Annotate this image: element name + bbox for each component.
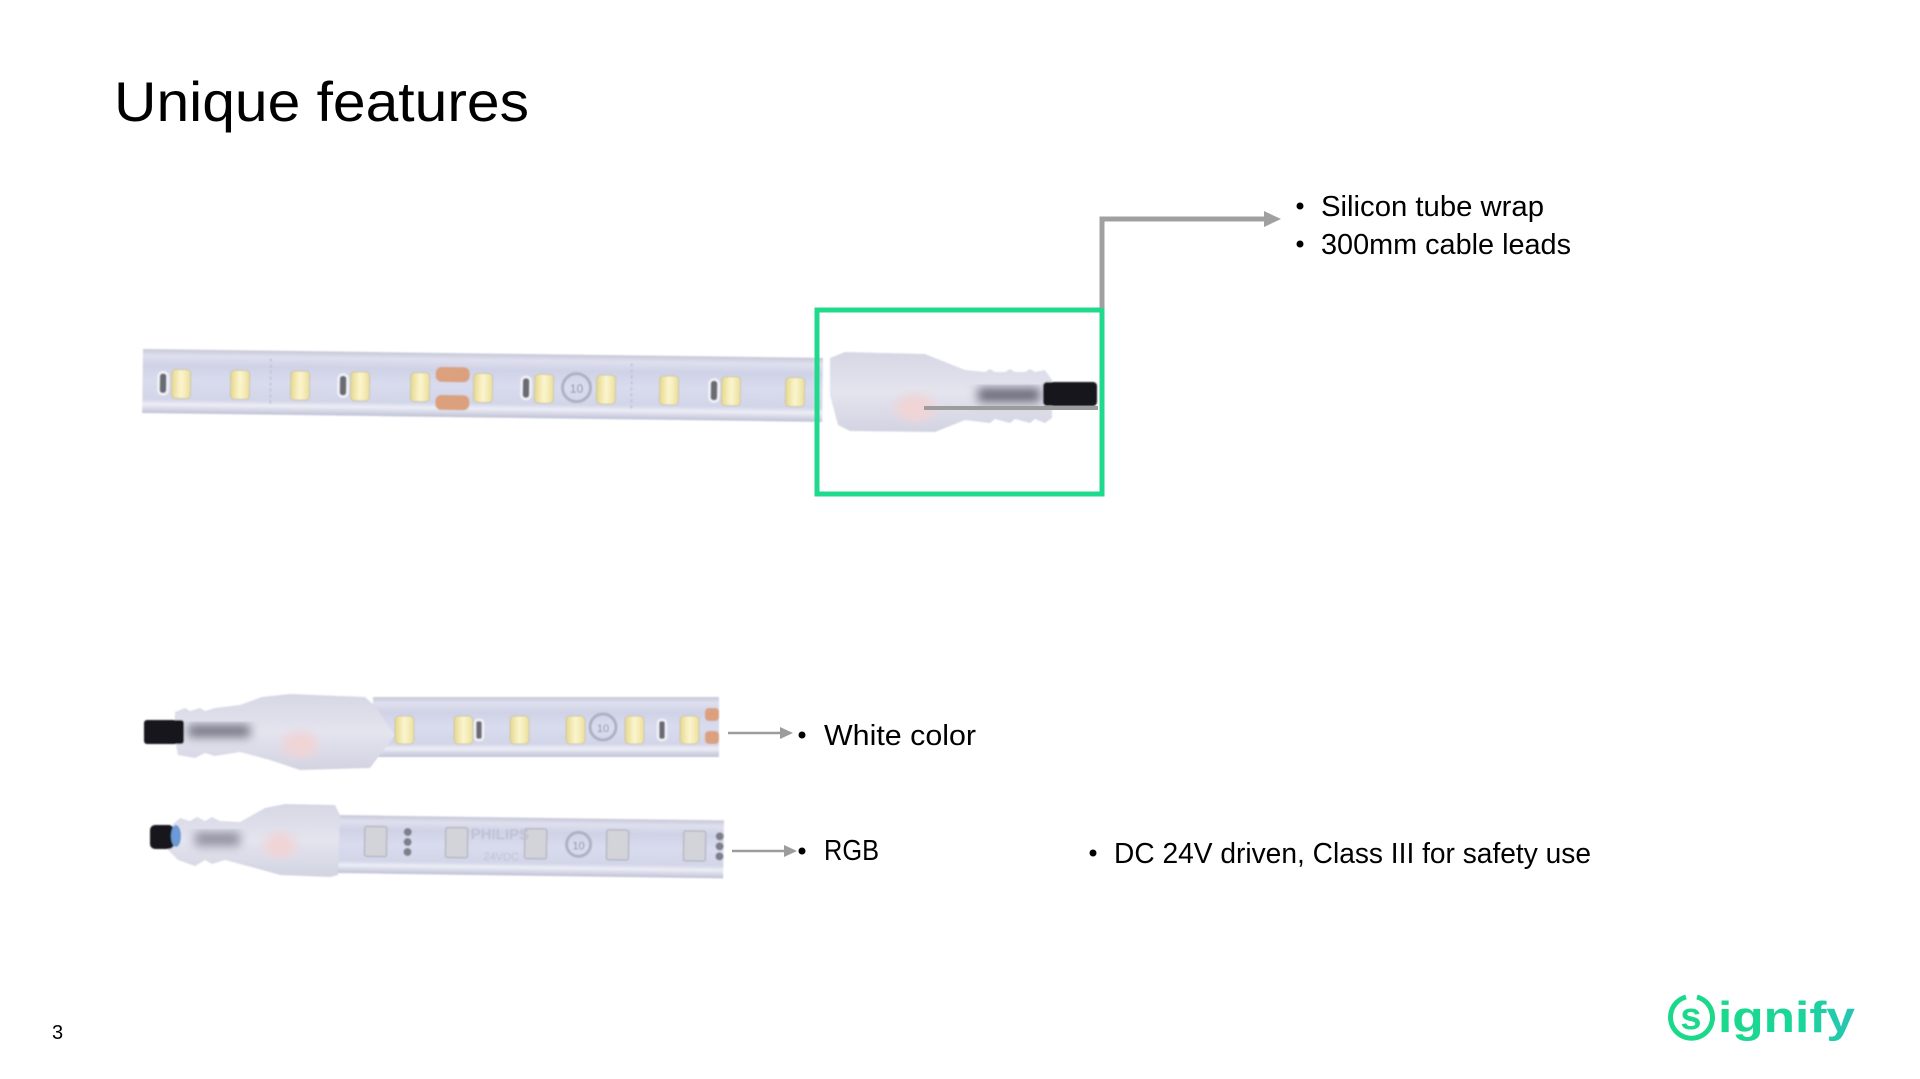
logo: Signify (1671, 993, 1856, 1042)
arrow: callout to features (1102, 211, 1281, 308)
strip body (142, 349, 823, 422)
photo: LED strip with end cap (142, 349, 1097, 432)
cap interior shading (895, 388, 1040, 422)
label: RGB: RGB (824, 835, 879, 867)
green highlight box (817, 310, 1102, 494)
note: DC driven: DC 24V driven, Class III for safety use (1114, 838, 1591, 870)
label: white color: White color (824, 720, 976, 752)
label: RGB (798, 835, 879, 867)
silicone end cap (830, 352, 1052, 432)
photo: RGB strip: PHILIPS (471, 826, 529, 844)
arrow: RGB (732, 845, 797, 857)
feature list: 300mm cable leads (1321, 229, 1571, 261)
arrow: white color (728, 727, 793, 739)
photo: white strip (144, 694, 719, 770)
feature list: Silicon tube wrap (1321, 191, 1544, 223)
black cable (1043, 382, 1097, 406)
strip body: 10 (570, 382, 584, 396)
photo: RGB strip: 24VDC (483, 851, 519, 864)
page number: 3 (52, 1022, 63, 1044)
logo: Signify: s (1680, 996, 1702, 1038)
photo: white strip: 10 (597, 723, 609, 735)
photo: RGB strip: 10 (572, 840, 585, 852)
logo: Signify: ignify (1718, 993, 1856, 1042)
photo: RGB strip (150, 804, 724, 878)
feature list (1296, 191, 1571, 261)
grey wire (924, 406, 1098, 410)
title: Unique features (114, 70, 529, 133)
